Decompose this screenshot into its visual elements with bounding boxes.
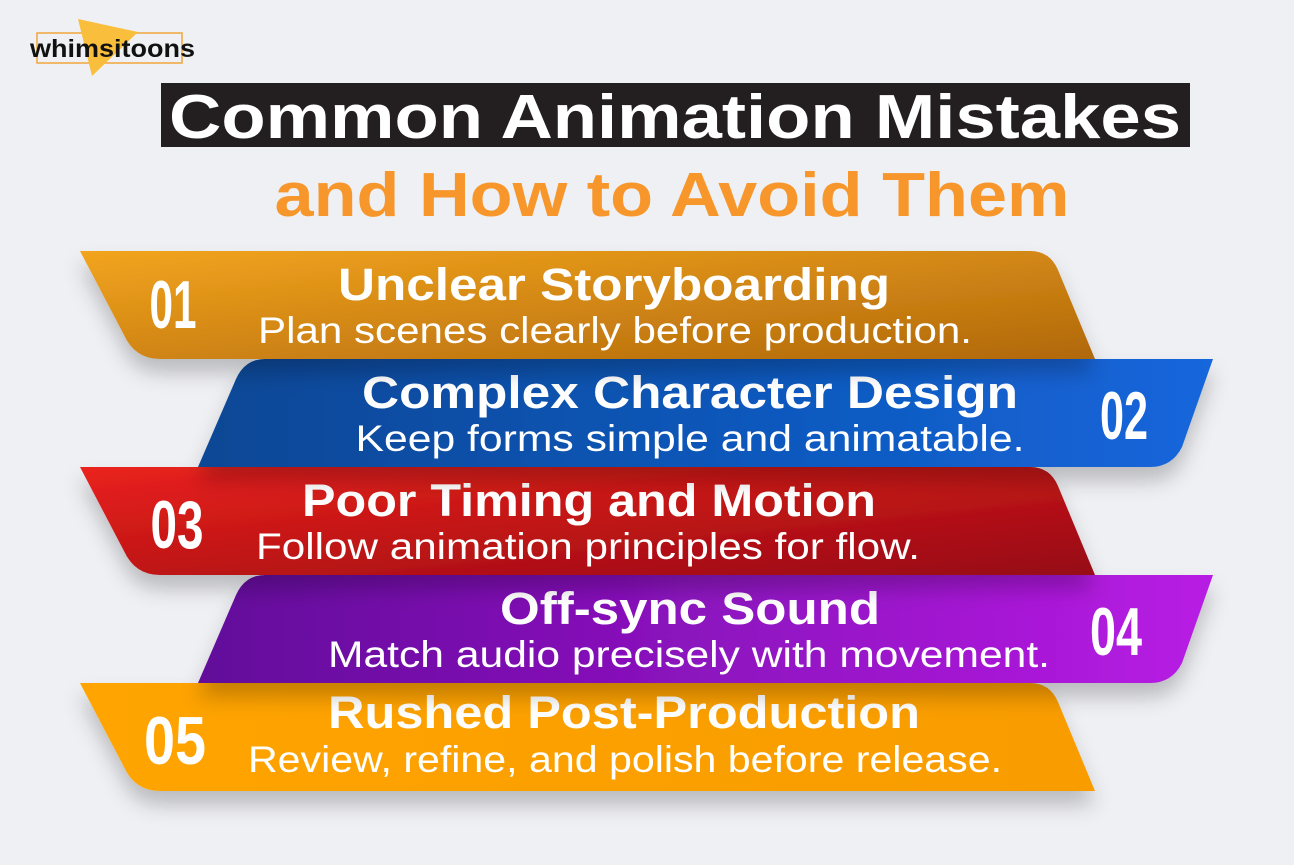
band 2 <box>198 359 1213 467</box>
band 4 <box>198 575 1213 683</box>
band 3: Poor Timing and Motion <box>302 475 876 526</box>
band 4: 04 <box>1090 594 1142 670</box>
title line 2: and How to Avoid Them <box>274 161 1070 230</box>
band 5: Review, refine, and polish before release. <box>248 739 1002 780</box>
title line 1: Common Animation Mistakes <box>169 83 1181 152</box>
band 2: Keep forms simple and animatable. <box>356 418 1024 459</box>
band 5: 05 <box>144 703 206 779</box>
band 3: Follow animation principles for flow. <box>256 526 920 567</box>
band 1: 01 <box>150 267 196 343</box>
band 1: Unclear Storyboarding <box>338 259 890 310</box>
band 1: Plan scenes clearly before production. <box>258 310 972 351</box>
band 4: Match audio precisely with movement. <box>328 634 1050 675</box>
band 1 <box>80 251 1095 359</box>
band 5: Rushed Post-Production <box>328 687 920 738</box>
band 2: Complex Character Design <box>362 367 1018 418</box>
band 3: 03 <box>150 487 204 563</box>
logo: whimsitoons <box>29 35 195 63</box>
band 5 <box>80 683 1095 791</box>
band 4: Off-sync Sound <box>500 583 880 634</box>
band 2: 02 <box>1100 378 1148 454</box>
band 3 <box>80 467 1095 575</box>
logo <box>29 19 195 76</box>
